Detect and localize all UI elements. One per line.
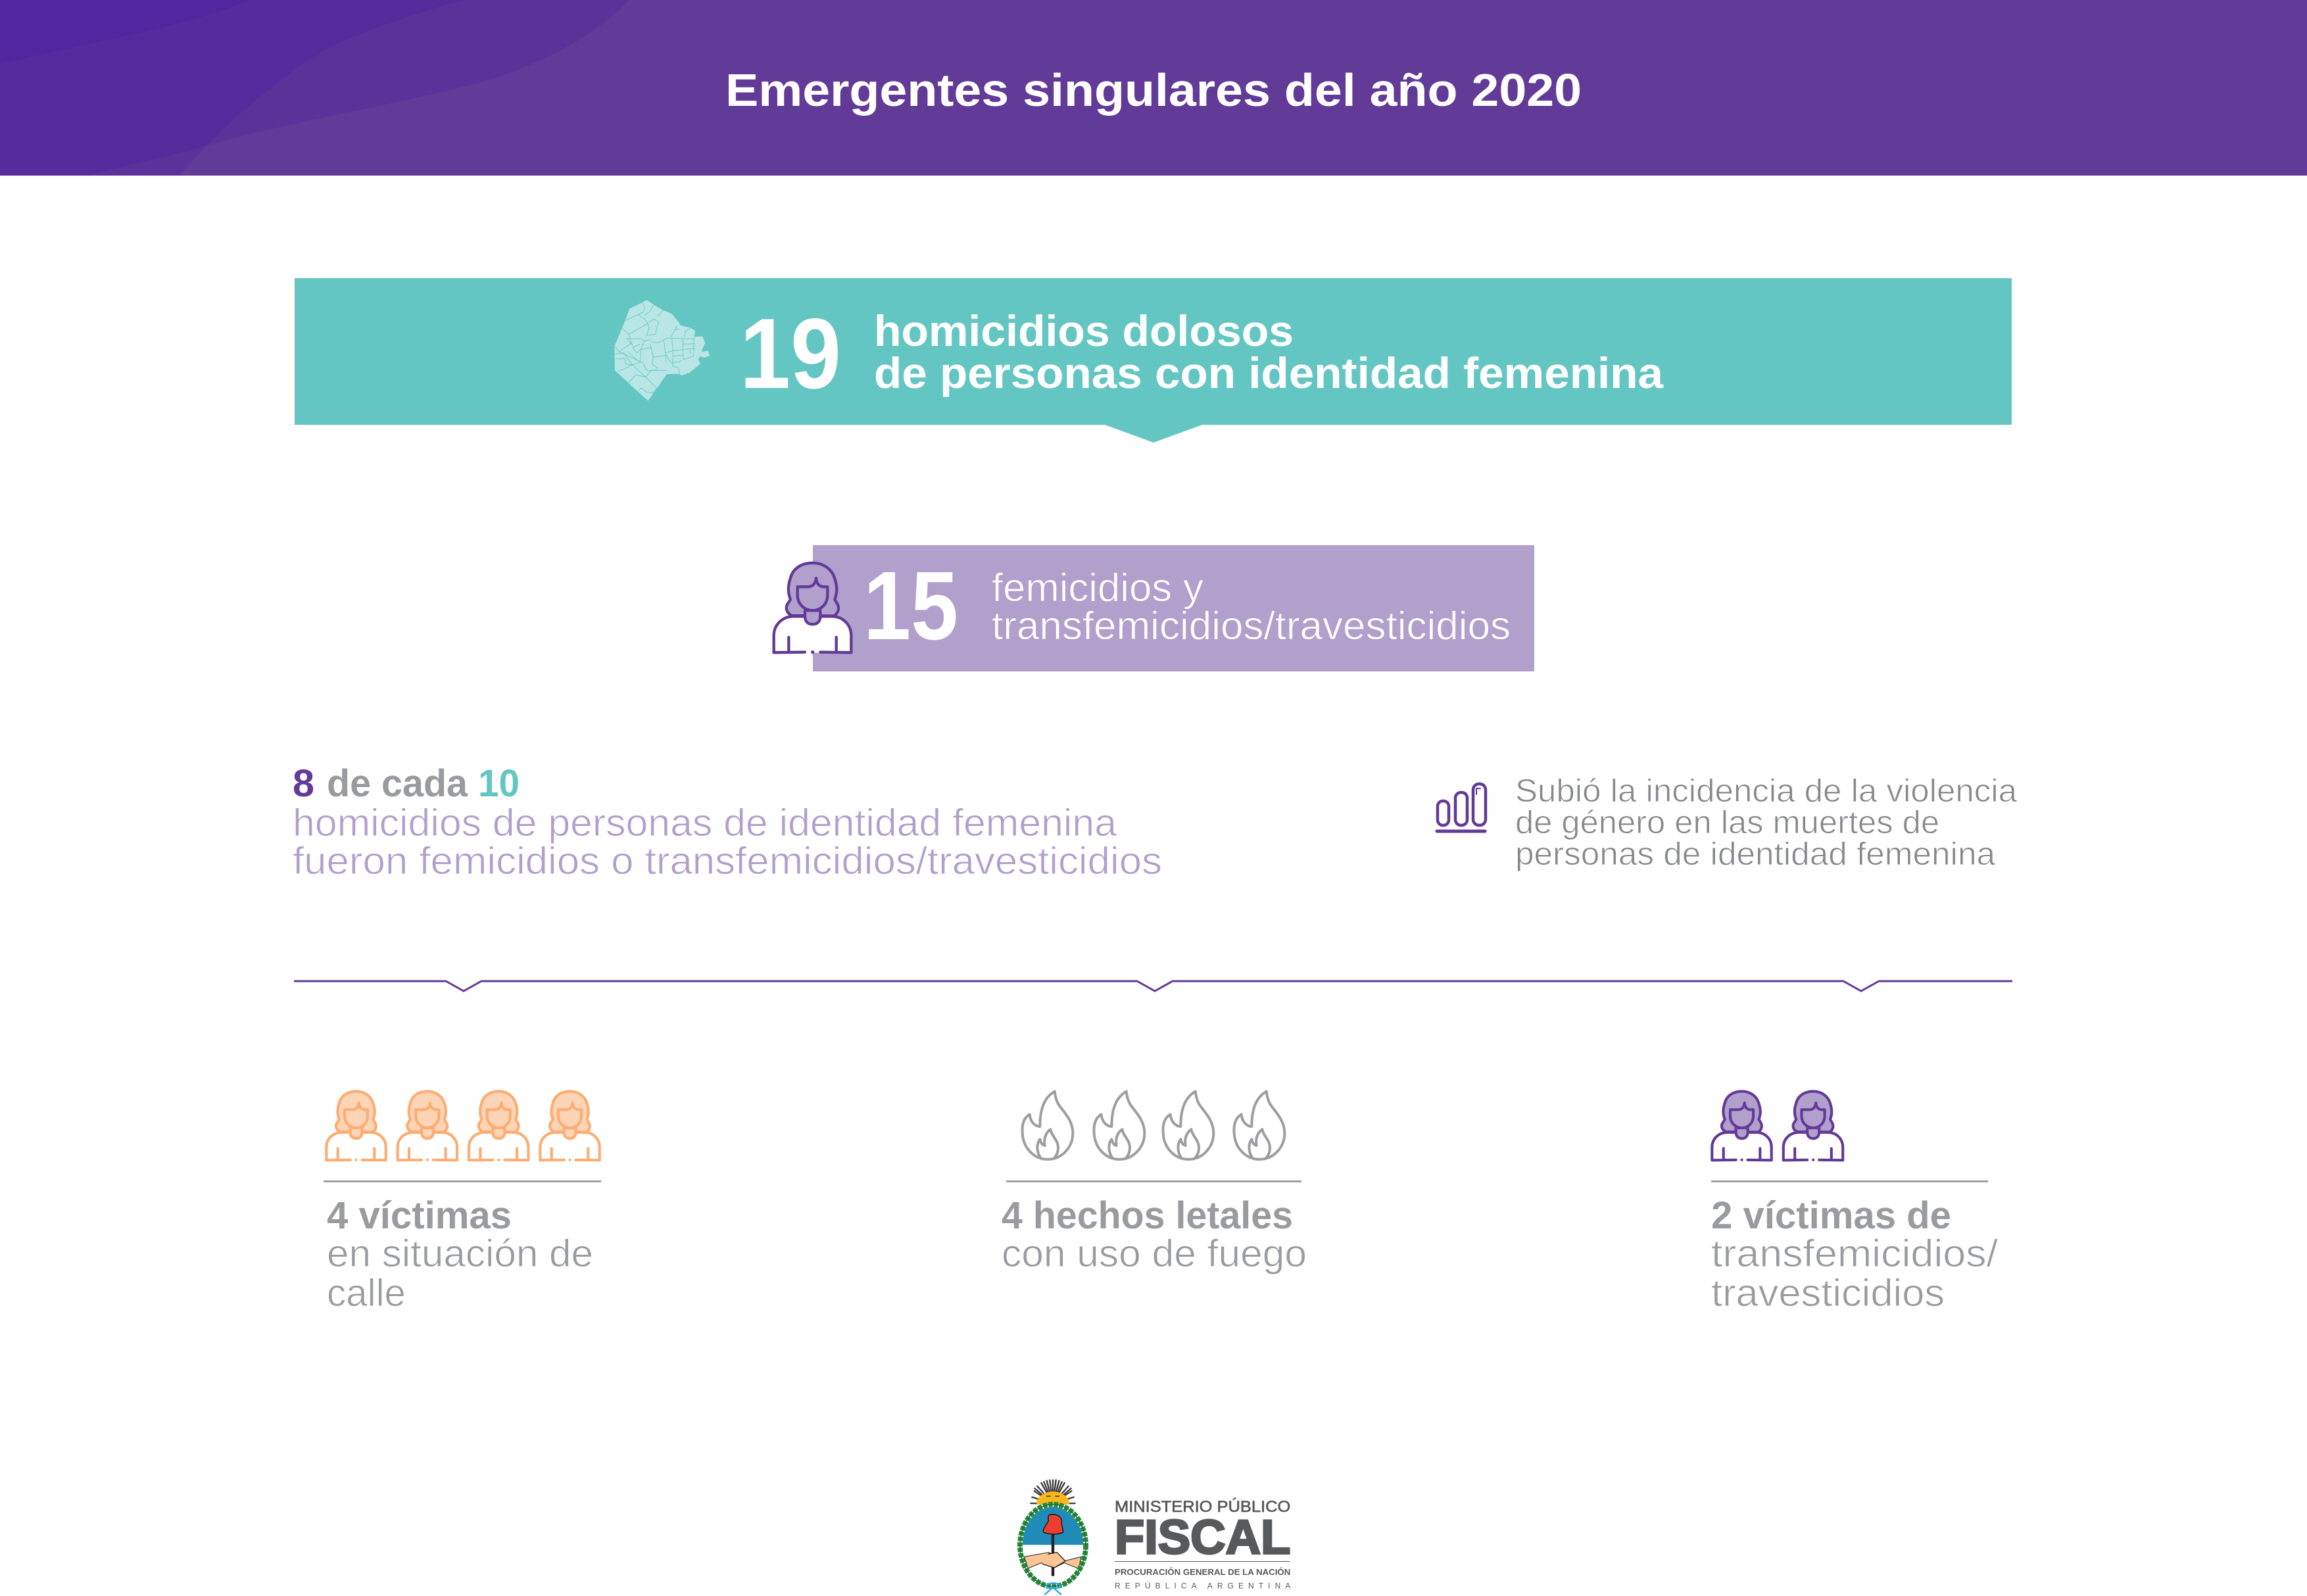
caption <box>1711 1194 1999 1315</box>
teal banner with pointer <box>295 278 2012 443</box>
icon: coat of arms <box>1019 1480 1087 1595</box>
purple box <box>813 545 1534 671</box>
logo: Ministerio Público Fiscal <box>1019 1480 1290 1595</box>
femicide text: transfemicidios/travesticidios <box>992 604 1511 648</box>
panel: 4 víctimas en situación de calle <box>324 1092 601 1315</box>
number 19: 19 <box>740 298 841 410</box>
number 15: 15 <box>863 552 958 660</box>
icon: woman <box>774 563 851 654</box>
icon: bar chart <box>1437 784 1486 831</box>
caption: 4 hechos letales <box>1002 1194 1293 1237</box>
caption: en situación de <box>327 1232 593 1275</box>
panel: 2 víctimas de transfemicidios <box>1711 1092 1999 1315</box>
homicide text: homicidios dolosos <box>874 306 1294 355</box>
caption: 2 víctimas de <box>1711 1194 1951 1237</box>
text block: incidencia <box>1515 773 2018 872</box>
icons: four flames <box>1022 1092 1284 1159</box>
caption: calle <box>327 1272 406 1315</box>
caption <box>327 1194 593 1315</box>
header background with curved shapes <box>0 0 2307 176</box>
icon: map of Buenos Aires city <box>614 300 710 400</box>
caption: con uso de fuego <box>1002 1232 1307 1275</box>
logo text: REPÚBLICA ARGENTINA <box>1115 1581 1290 1591</box>
homicide text <box>874 306 1664 397</box>
panel: 15 femicidios <box>774 545 1534 671</box>
panel: 19 homicidios dolosos <box>295 278 2012 443</box>
logo text <box>1115 1498 1290 1591</box>
text block: 8 de cada 10: 10 <box>478 762 520 805</box>
logo text: MINISTERIO PÚBLICO <box>1115 1498 1290 1516</box>
icons: two women <box>1712 1092 1843 1161</box>
text block: 8 de cada 10: 8 <box>293 762 314 805</box>
logo text: PROCURACIÓN GENERAL DE LA NACIÓN <box>1115 1567 1290 1577</box>
logo text: FISCAL <box>1115 1510 1290 1564</box>
femicide text <box>992 566 1511 648</box>
panel: 4 hechos letales <box>1002 1092 1307 1275</box>
text block: 8 de cada 10: fueron femicidios o transfemicidios/travesticidios <box>293 840 1162 883</box>
femicide text: femicidios y <box>992 566 1203 610</box>
text block: incidencia: de género en las muertes de <box>1515 805 1939 840</box>
icons: four women <box>326 1092 600 1161</box>
title: Emergentes singulares del año 2020 <box>725 64 1582 116</box>
text block: incidencia: Subió la incidencia de la violencia <box>1515 773 2018 809</box>
caption: transfemicidios/ <box>1711 1232 1999 1275</box>
homicide text: de personas con identidad femenina <box>874 349 1664 397</box>
text block: 8 de cada 10: homicidios de personas de identidad femenina <box>293 802 1117 844</box>
text block: 8 de cada 10: de cada <box>327 762 468 805</box>
caption <box>1002 1194 1307 1275</box>
text block: incidencia: personas de identidad femenina <box>1515 836 1996 872</box>
text block: 8 de cada 10 <box>293 762 1162 883</box>
caption: travesticidios <box>1711 1272 1945 1315</box>
header banner <box>0 0 2307 176</box>
caption: 4 víctimas <box>327 1194 512 1237</box>
